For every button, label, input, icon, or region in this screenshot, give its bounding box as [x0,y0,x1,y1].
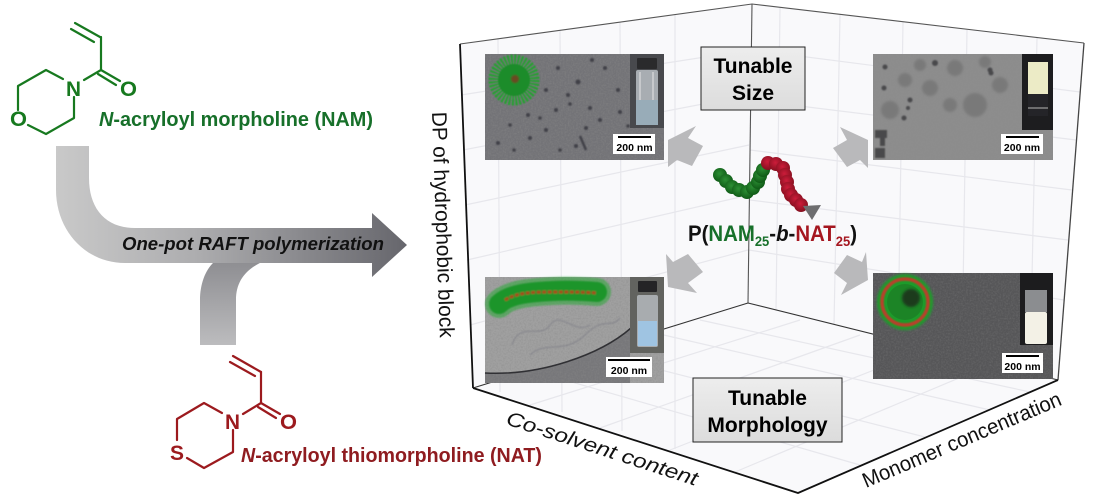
vial [630,54,664,128]
NAT molecule: S [170,442,184,465]
panel: vesicle network TEM [873,54,1053,160]
polymer formula: 25 [836,233,850,249]
vial [630,277,664,353]
NAM molecule: O [120,78,137,101]
icon: spherical micelle [498,64,530,96]
polymer formula: 25 [755,233,769,249]
vial [1022,54,1053,130]
scale bar: 200 nm [611,365,647,377]
axis label: DP of hydrophobic block: DP of hydrophobic block [427,111,458,339]
heading box: Tunable Size: Tunable [714,55,792,78]
NAT molecule [170,356,297,468]
NAM molecule [10,23,137,134]
arrow: to bottom-left panel [666,254,703,293]
NAM molecule: N [66,78,81,101]
heading box: Tunable Morphology: Morphology [707,414,828,437]
arrow: to top-right panel [833,127,868,168]
polymer formula: b-NAT [776,221,839,246]
curved reaction arrow [56,146,407,277]
arrow: to top-left panel [668,126,703,167]
arrow: to bottom-right panel [834,252,868,295]
axis label: monomer concentration: Monomer concentration [859,388,1065,493]
NAM label: N-acryloyl morpholine (NAM) [99,109,373,131]
3D axes box [460,4,1084,493]
panel: vesicles TEM [873,273,1053,379]
scale bar: 200 nm [616,142,653,154]
NAT reaction arm of curved arrow [200,262,262,345]
heading box: Tunable Size: Size [732,82,774,105]
polymer formula: - [769,221,776,246]
polymer formula: ) [850,221,857,246]
NAT label: N-acryloyl thiomorpholine (NAT) [241,445,542,467]
NAT molecule: O [280,411,297,434]
heading box: Tunable Size [701,47,805,110]
scale bar [606,357,652,377]
scale bar [1002,353,1043,373]
arrow label: One-pot RAFT polymerization [122,233,384,254]
heading box: Tunable Morphology: Tunable [728,387,807,410]
panel: worm micelles TEM [485,277,664,383]
axis label: co-solvent content: Co-solvent content [503,408,702,491]
scale bar [613,134,655,154]
panel: spherical micelles TEM [485,54,664,160]
polymer formula: P(NAM [688,221,759,246]
icon: worm micelle [499,291,597,304]
scale bar: 200 nm [1004,142,1040,154]
NAT molecule: N [225,411,240,434]
heading box: Tunable Morphology [693,378,842,442]
icon: vesicle [877,274,933,330]
scale bar [1001,134,1043,154]
vial [1020,273,1053,345]
block copolymer chain [713,156,821,220]
scale bar: 200 nm [1004,361,1041,373]
NAM molecule: O [10,108,27,131]
